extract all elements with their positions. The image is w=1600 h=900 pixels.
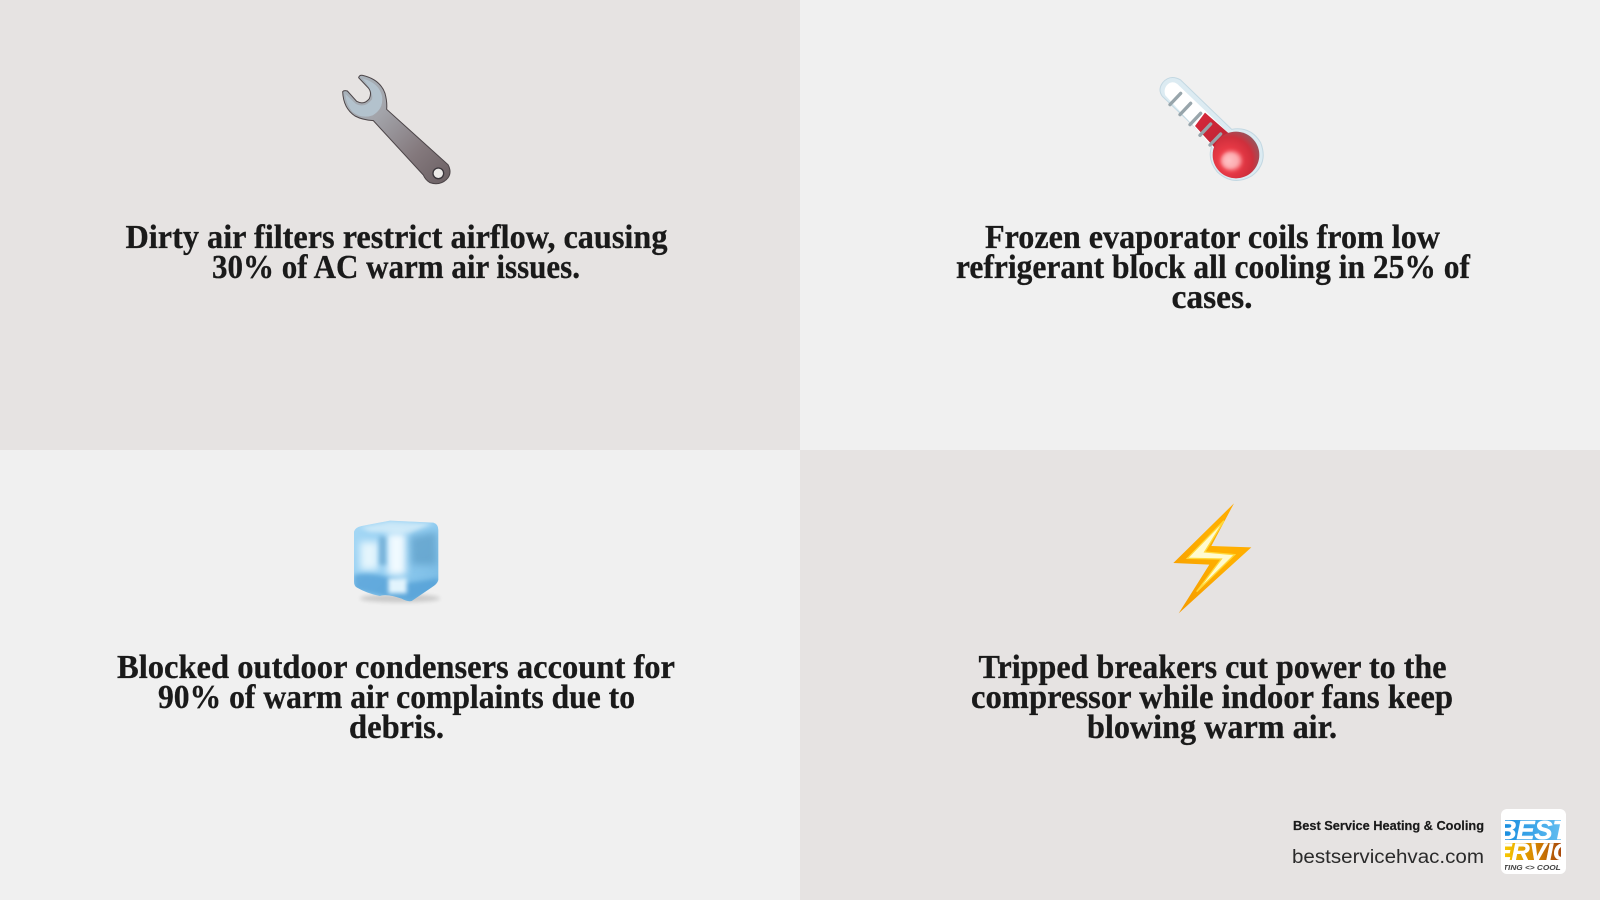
- panel: tripped breakers: [800, 450, 1600, 900]
- panel: dirty air filters: [0, 0, 800, 450]
- brand name: Best Service Heating & Cooling: [1293, 818, 1484, 833]
- heading: tripped breakers: Tripped breakers cut power to the: [978, 649, 1446, 686]
- icon: ice cube: [354, 521, 440, 602]
- heading: blocked condensers: 90% of warm air complaints due to: [158, 679, 635, 716]
- heading: blocked condensers: Blocked outdoor condensers account for: [117, 649, 675, 686]
- icon: lightning bolt: [1173, 503, 1251, 613]
- heading: blocked condensers: [117, 649, 675, 746]
- heading: dirty air filters: Dirty air filters restrict airflow, causing: [126, 219, 668, 256]
- website url: bestservicehvac.com: [1292, 847, 1484, 868]
- logo: BEST: [1497, 815, 1571, 845]
- heading: tripped breakers: blowing warm air.: [1087, 709, 1337, 746]
- heading: tripped breakers: compressor while indoor fans keep: [971, 679, 1453, 716]
- heading: frozen evaporator coils: refrigerant block all cooling in 25% of: [956, 249, 1471, 286]
- icon: wrench: [343, 75, 450, 184]
- panel: blocked condensers: [117, 520, 674, 738]
- panel: frozen evaporator coils: [800, 0, 1600, 450]
- heading: tripped breakers: [971, 649, 1453, 746]
- heading: frozen evaporator coils: [956, 219, 1471, 316]
- logo: TING <> COOLI: [1503, 865, 1564, 872]
- heading: frozen evaporator coils: Frozen evaporator coils from low: [985, 219, 1440, 256]
- icon: thermometer: [1160, 78, 1263, 180]
- heading: dirty air filters: 30% of AC warm air issues.: [212, 249, 580, 286]
- heading: frozen evaporator coils: cases.: [1172, 279, 1252, 316]
- heading: blocked condensers: debris.: [349, 709, 444, 746]
- heading: dirty air filters: [126, 219, 668, 286]
- logo: ERVIC: [1495, 839, 1572, 866]
- logo: [1501, 809, 1566, 874]
